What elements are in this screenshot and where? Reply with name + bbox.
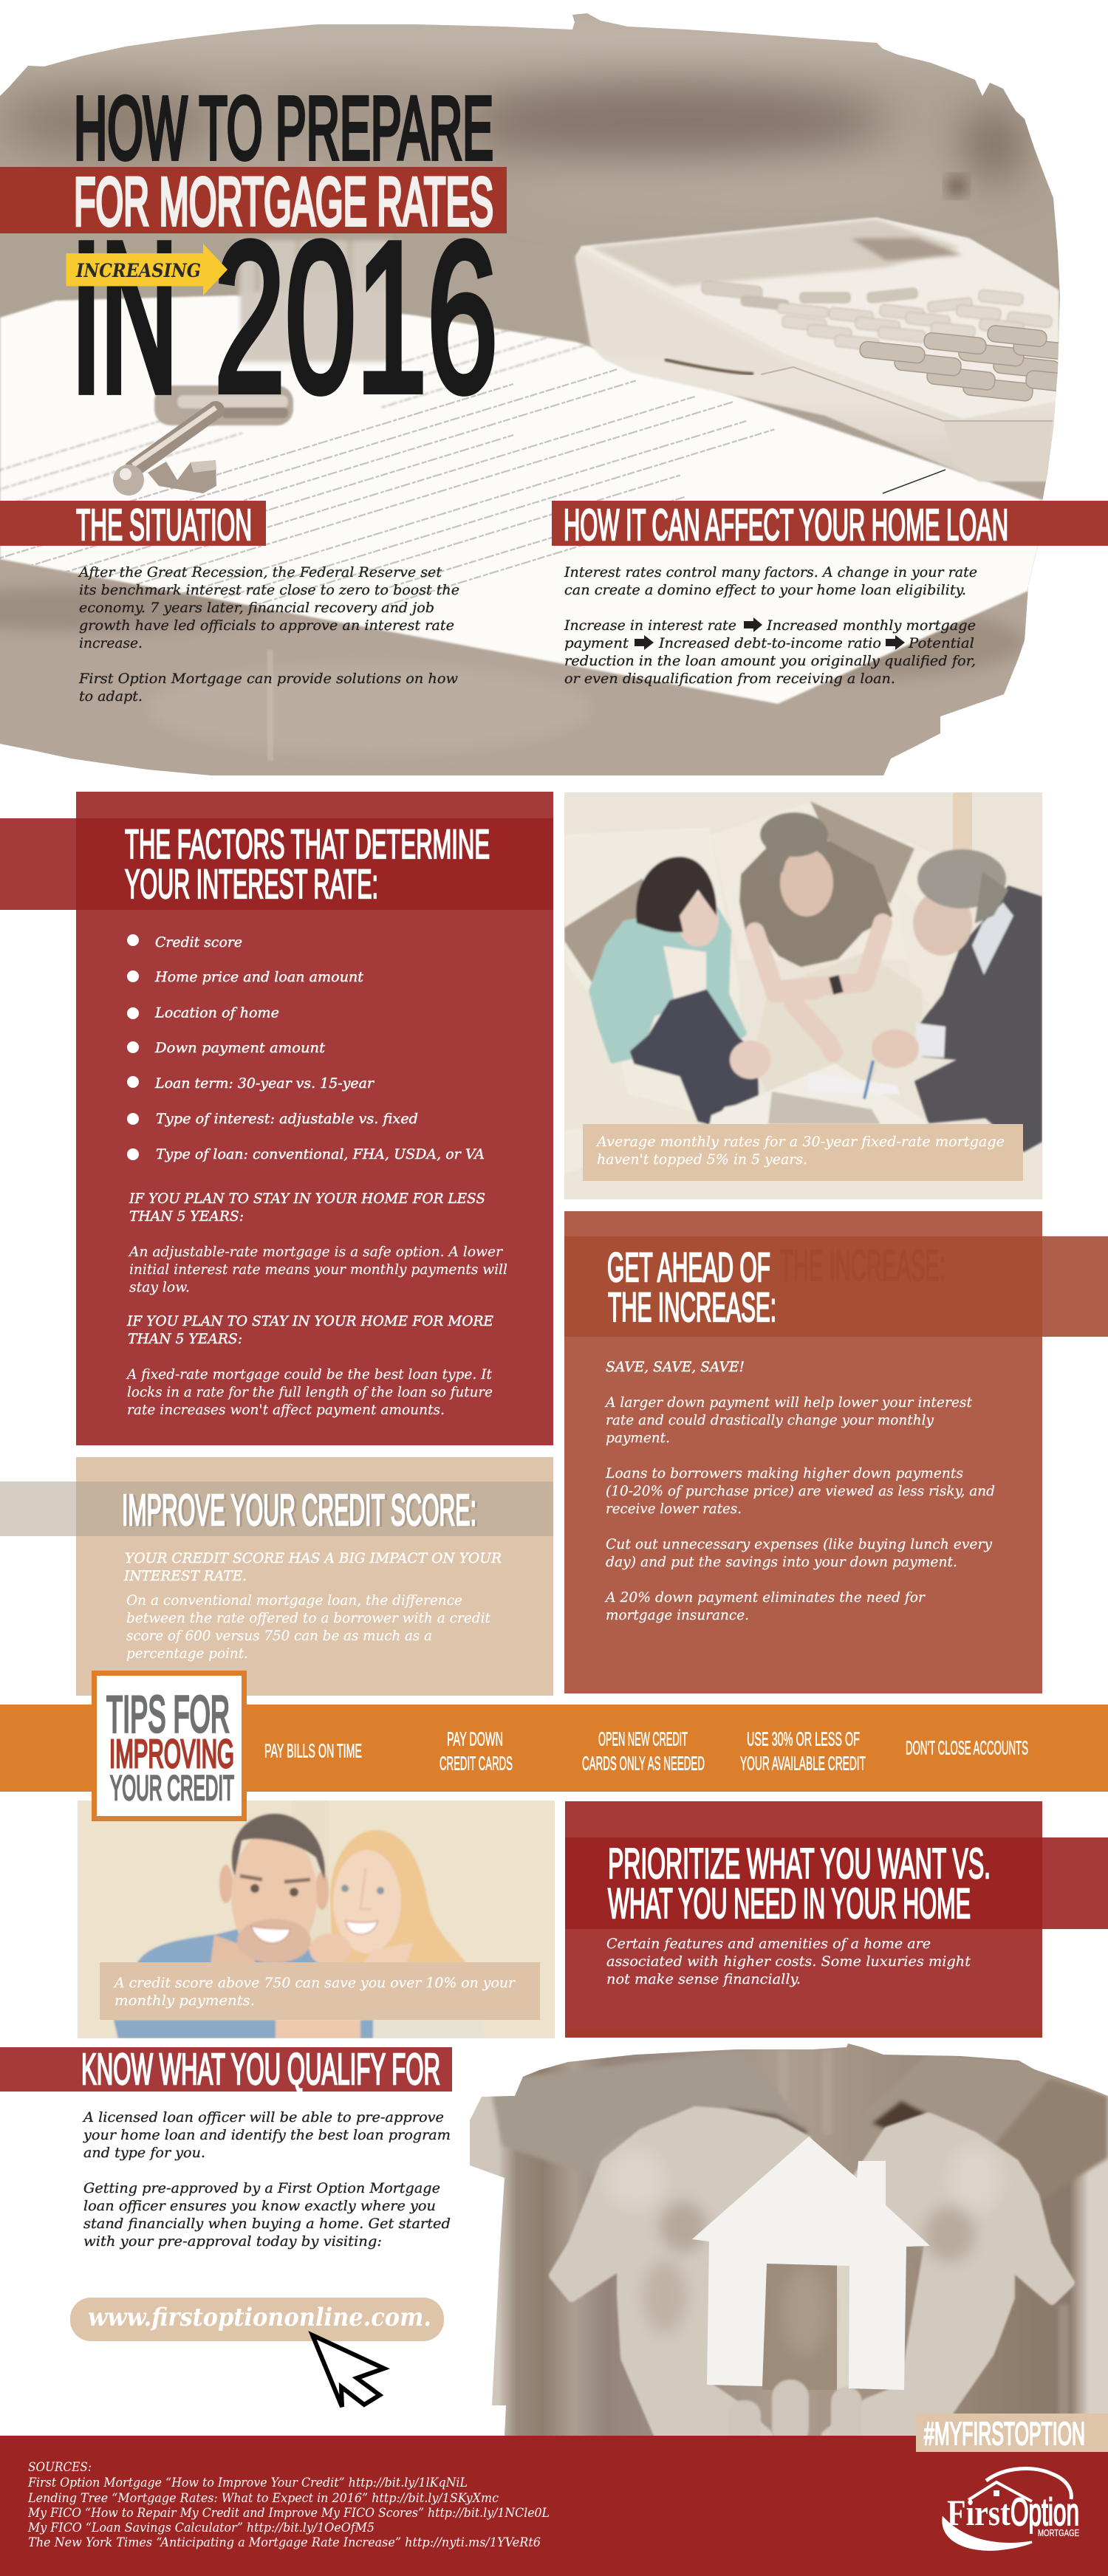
pillows bbox=[810, 801, 914, 904]
panel: tips for improving your credit bbox=[0, 1674, 1108, 1818]
body text: SAVE, SAVE, SAVE! bbox=[606, 1359, 745, 1375]
heading band bbox=[565, 1837, 1042, 1929]
man ears bbox=[219, 1865, 233, 1903]
website pill: www.firstoptiononline.com. bbox=[88, 2303, 431, 2332]
woman blouse bbox=[373, 2020, 484, 2038]
calculator keys bbox=[701, 281, 1053, 351]
bullet list: Home price and loan amount bbox=[154, 969, 363, 985]
door opening bbox=[762, 2263, 849, 2390]
advice text: An adjustable-rate mortgage is a safe option. A lower bbox=[128, 1244, 504, 1260]
body text: receive lower rates. bbox=[606, 1501, 742, 1517]
contract paper bbox=[0, 295, 1049, 704]
advice text: stay low. bbox=[129, 1279, 190, 1295]
body text: your home loan and identify the best loan program bbox=[83, 2127, 451, 2143]
man forearm bbox=[276, 2020, 360, 2038]
body text: can create a domino effect to your home loan eligibility. bbox=[564, 582, 966, 598]
heading bar bbox=[0, 501, 266, 546]
paper text lines bbox=[0, 330, 774, 606]
sofa bbox=[565, 835, 742, 1132]
body text: Cut out unnecessary expenses (like buying lunch every bbox=[606, 1536, 992, 1552]
photo caption bbox=[100, 1962, 540, 2020]
body text bbox=[564, 564, 977, 687]
hands bbox=[553, 2111, 807, 2435]
woman eyes bbox=[341, 1885, 349, 1892]
website pill bbox=[70, 2298, 444, 2341]
icon: mouse cursor bbox=[312, 2335, 384, 2407]
panel: factors that determine your interest rate bbox=[0, 792, 553, 1445]
body text: and type for you. bbox=[83, 2145, 205, 2161]
panel: tips for improving your credit: YOUR CREDIT bbox=[110, 1769, 234, 1807]
body text: loan officer ensures you know exactly where you bbox=[83, 2198, 436, 2214]
man pants bbox=[758, 954, 923, 1090]
body text: to adapt. bbox=[79, 688, 143, 705]
man face bbox=[231, 1829, 317, 1962]
bullet list: Down payment amount bbox=[154, 1040, 325, 1056]
body text bbox=[78, 564, 459, 705]
calculator bbox=[575, 218, 1086, 482]
body text: Certain features and amenities of a home are bbox=[606, 1936, 931, 1952]
woman top bbox=[663, 946, 706, 1001]
body text: (10-20% of purchase price) are viewed as less risky, and bbox=[606, 1483, 995, 1499]
woman jeans bbox=[632, 991, 757, 1123]
woman hands bbox=[730, 1041, 771, 1079]
body text bbox=[604, 1359, 995, 1623]
section: how it can affect your home loan bbox=[552, 501, 1108, 687]
sleeves bbox=[492, 2051, 806, 2178]
man hair bbox=[232, 1814, 325, 1880]
woman hand bbox=[310, 1933, 351, 1966]
photo panel: couple with loan officer: Average monthly rates for a 30-year fixed-rate mortgage bbox=[595, 1134, 1005, 1150]
woman head bbox=[677, 894, 719, 947]
footer: sources: SOURCES: bbox=[28, 2460, 92, 2475]
body text: its benchmark interest rate close to zero to boost the bbox=[79, 582, 459, 598]
advice text: locks in a rate for the full length of the loan so future bbox=[127, 1384, 493, 1400]
advice text: THAN 5 YEARS: bbox=[129, 1208, 244, 1224]
panel: tips for improving your credit: TIPS FOR bbox=[106, 1685, 230, 1743]
man shirt bbox=[137, 1928, 325, 1964]
title band bbox=[0, 167, 507, 233]
increasing arrow bbox=[66, 244, 228, 295]
heading bar bbox=[552, 501, 1108, 546]
body text: Increased debt-to-income ratio bbox=[658, 635, 881, 651]
body text: YOUR CREDIT SCORE HAS A BIG IMPACT ON YOUR bbox=[125, 1550, 502, 1566]
footer: sources: My FICO “Loan Savings Calculator” http://bit.ly/1OeOfM5 bbox=[27, 2521, 375, 2535]
panel: couple photo: monthly payments. bbox=[114, 1993, 255, 2009]
heading bar bbox=[0, 2047, 452, 2092]
advice text: rate increases won't affect payment amounts. bbox=[127, 1402, 445, 1418]
heading band bbox=[0, 818, 76, 910]
panel: get ahead of the increase bbox=[564, 1211, 1108, 1693]
body text: After the Great Recession, the Federal Reserve set bbox=[78, 564, 442, 580]
advice text: IF YOU PLAN TO STAY IN YOUR HOME FOR LESS bbox=[129, 1191, 485, 1207]
title bbox=[0, 78, 507, 436]
body text: rate and could drastically change your monthly bbox=[606, 1412, 934, 1428]
panel: tips for improving your credit: IMPROVING bbox=[109, 1731, 234, 1776]
body text: A licensed loan officer will be able to pre-approve bbox=[82, 2109, 444, 2125]
panel: couple photo bbox=[78, 1801, 555, 2038]
man smile bbox=[251, 1926, 290, 1943]
panel: improve your credit score bbox=[0, 1457, 553, 1696]
body text bbox=[606, 1936, 971, 1987]
body text: score of 600 versus 750 can be as much as a bbox=[126, 1628, 432, 1644]
body text: day) and put the savings into your down payment. bbox=[606, 1554, 957, 1570]
bullet list bbox=[127, 934, 485, 1162]
body text: A 20% down payment eliminates the need for bbox=[604, 1589, 926, 1606]
logo: First Option Mortgage: MORTGAGE bbox=[1038, 2527, 1079, 2538]
tip items bbox=[264, 1729, 1028, 1774]
body text: growth have led officials to approve an interest rate bbox=[79, 617, 454, 634]
body text: payment bbox=[564, 635, 629, 651]
bullet list: Loan term: 30-year vs. 15-year bbox=[154, 1075, 375, 1092]
body text: Loans to borrowers making higher down payments bbox=[605, 1465, 963, 1481]
advice text bbox=[126, 1191, 507, 1418]
title: INCREASING bbox=[75, 260, 201, 281]
panel: couple photo: A credit score above 750 can save you over 10% on your bbox=[113, 1975, 516, 1991]
orange band bbox=[0, 1705, 1108, 1792]
advice text: A fixed-rate mortgage could be the best loan type. It bbox=[126, 1366, 492, 1383]
logo: First Option Mortgage bbox=[943, 2469, 1079, 2549]
title: IN bbox=[72, 201, 177, 434]
body text: reduction in the loan amount you originally qualified for, bbox=[564, 653, 976, 669]
heading band bbox=[564, 1236, 1042, 1337]
footer: sources: First Option Mortgage “How to Improve Your Credit” http://bit.ly/1lKqNiL bbox=[27, 2476, 468, 2490]
tips title box bbox=[95, 1674, 244, 1818]
bullet list: Credit score bbox=[155, 934, 242, 950]
hero photo: calculator, key and contract bbox=[0, 0, 1108, 783]
body text: increase. bbox=[79, 635, 143, 651]
body text: with your pre-approval today by visiting: bbox=[83, 2233, 382, 2250]
body text: mortgage insurance. bbox=[606, 1607, 749, 1623]
heading band bbox=[0, 1481, 76, 1536]
photo panel: couple with loan officer: haven't topped 5% in 5 years. bbox=[597, 1151, 807, 1168]
woman cardigan bbox=[591, 909, 745, 1061]
right man suit bbox=[914, 886, 1042, 1152]
bullet list: Location of home bbox=[154, 1004, 279, 1021]
key bbox=[113, 386, 293, 496]
tip items: PAY DOWN bbox=[447, 1729, 503, 1750]
bullet list: Type of interest: adjustable vs. fixed bbox=[156, 1111, 418, 1127]
footer: sources: My FICO “How to Repair My Credit and Improve My FICO Scores” http://bit.ly/1NCle0L bbox=[27, 2506, 550, 2521]
body text: economy. 7 years later, financial recovery and job bbox=[79, 600, 434, 616]
body text: Increased monthly mortgage bbox=[766, 617, 976, 634]
domino arrows bbox=[635, 617, 905, 650]
center man head bbox=[780, 849, 833, 917]
body text: Interest rates control many factors. A change in your rate bbox=[564, 564, 977, 580]
paper house bbox=[692, 2137, 930, 2390]
photo: hands holding paper house bbox=[465, 2038, 1108, 2446]
body text: Potential bbox=[908, 635, 974, 651]
center man arms bbox=[755, 932, 816, 993]
section: the situation bbox=[0, 501, 459, 705]
body text: or even disqualification from receiving a loan. bbox=[564, 671, 895, 687]
body text: stand financially when buying a home. Get started bbox=[83, 2216, 451, 2232]
body text bbox=[82, 2109, 451, 2250]
body text: not make sense financially. bbox=[606, 1971, 801, 1987]
man neck bbox=[211, 1935, 255, 1964]
bullet list: Type of loan: conventional, FHA, USDA, or VA bbox=[156, 1146, 485, 1162]
panel: prioritize what you want bbox=[565, 1801, 1108, 2038]
woman face bbox=[333, 1850, 401, 1953]
table, laptop and papers bbox=[709, 1063, 931, 1126]
lower tabletop bbox=[0, 473, 1108, 783]
body text: First Option Mortgage can provide solutions on how bbox=[78, 671, 458, 687]
blurred house behind title bbox=[238, 238, 391, 295]
footer: sources: Lending Tree “Mortgage Rates: What to Expect in 2016” http://bit.ly/1SKyXmc bbox=[27, 2491, 499, 2506]
body text: associated with higher costs. Some luxuries might bbox=[606, 1953, 971, 1970]
body text: A larger down payment will help lower your interest bbox=[604, 1394, 972, 1411]
body text: percentage point. bbox=[126, 1645, 248, 1662]
center man shirt bbox=[742, 843, 890, 965]
body text: On a conventional mortgage loan, the difference bbox=[126, 1592, 462, 1609]
body text bbox=[123, 1550, 502, 1662]
body text: INTEREST RATE. bbox=[123, 1568, 247, 1584]
man brows and eyes bbox=[240, 1876, 310, 1882]
body text: Getting pre-approved by a First Option Mortgage bbox=[83, 2180, 440, 2196]
advice text: THAN 5 YEARS: bbox=[128, 1331, 242, 1347]
photo panel: couple with loan officer bbox=[564, 792, 1042, 1199]
logo: First Option Mortgage: First bbox=[947, 2492, 1010, 2533]
photo caption bbox=[583, 1124, 1023, 1181]
advice text: IF YOU PLAN TO STAY IN YOUR HOME FOR MORE bbox=[126, 1313, 493, 1329]
body text: between the rate offered to a borrower with a credit bbox=[126, 1610, 490, 1626]
advice text: initial interest rate means your monthly payments will bbox=[129, 1261, 507, 1278]
footer: sources bbox=[0, 2436, 1108, 2576]
fingers bbox=[728, 2380, 862, 2446]
body text: Increase in interest rate bbox=[564, 617, 736, 634]
section: know what you qualify for bbox=[0, 2045, 452, 2250]
footer: sources: The New York Times “Anticipating a Mortgage Rate Increase” http://nyti.ms/1YVeRt6 bbox=[28, 2535, 541, 2550]
woman hair bbox=[330, 1830, 467, 1964]
body text: payment. bbox=[606, 1430, 670, 1446]
